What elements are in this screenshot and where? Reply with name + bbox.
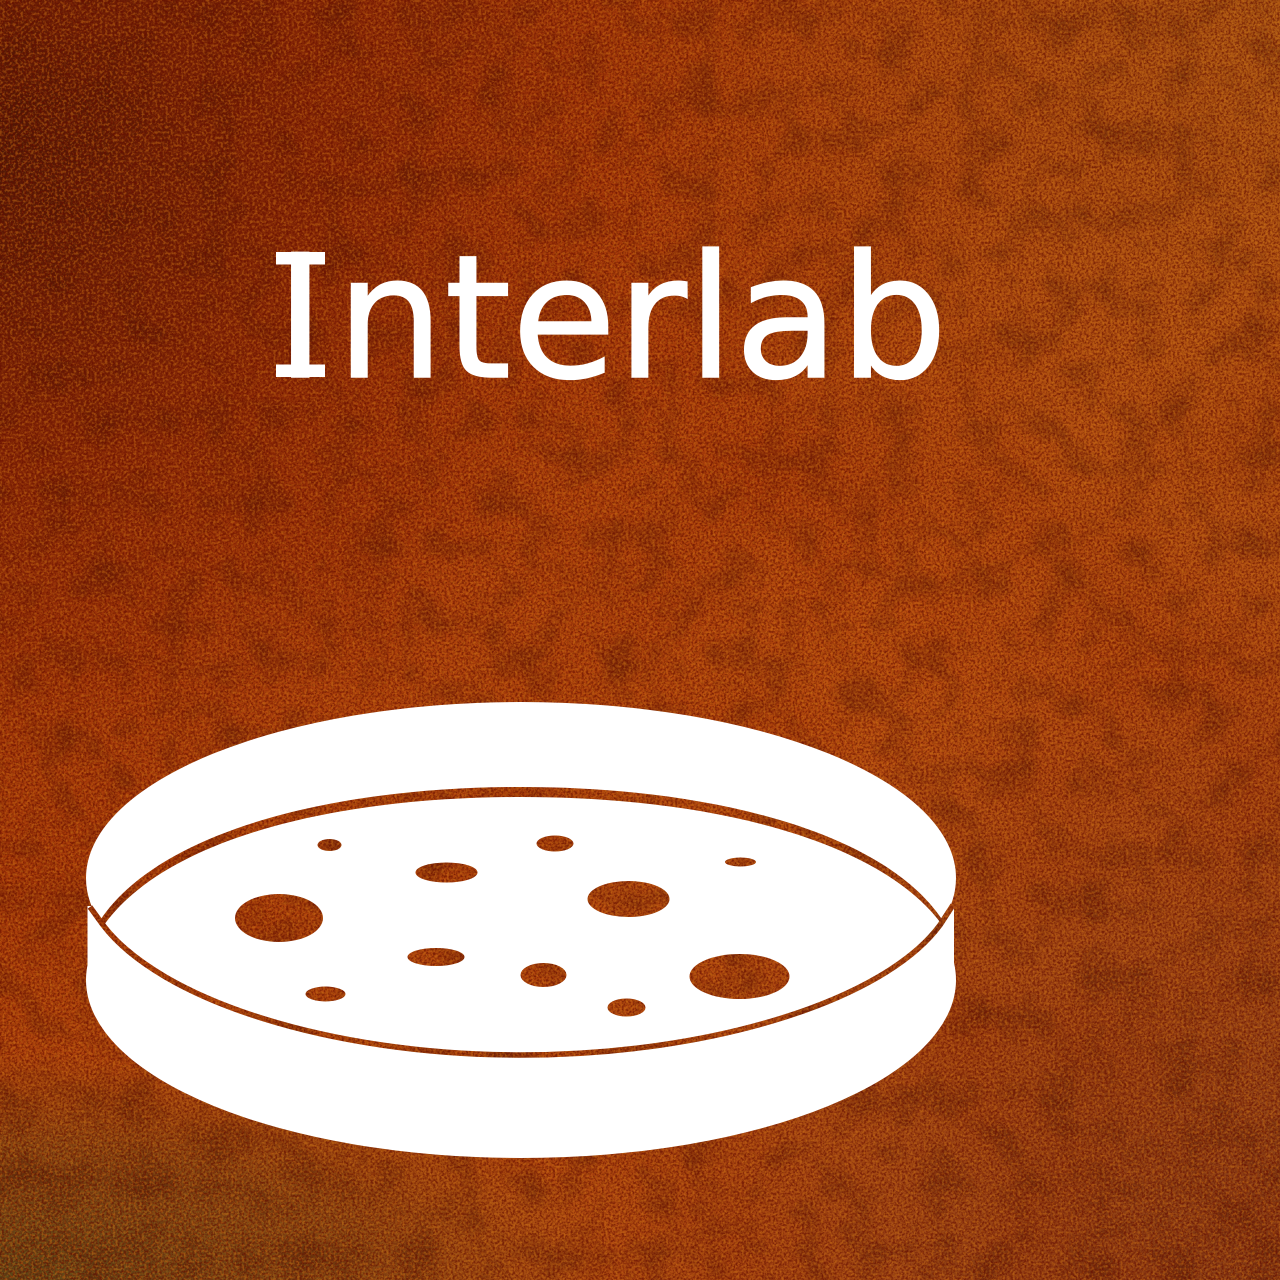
icon: petri dish with colonies bbox=[80, 695, 965, 1165]
title: Interlab bbox=[275, 219, 948, 418]
